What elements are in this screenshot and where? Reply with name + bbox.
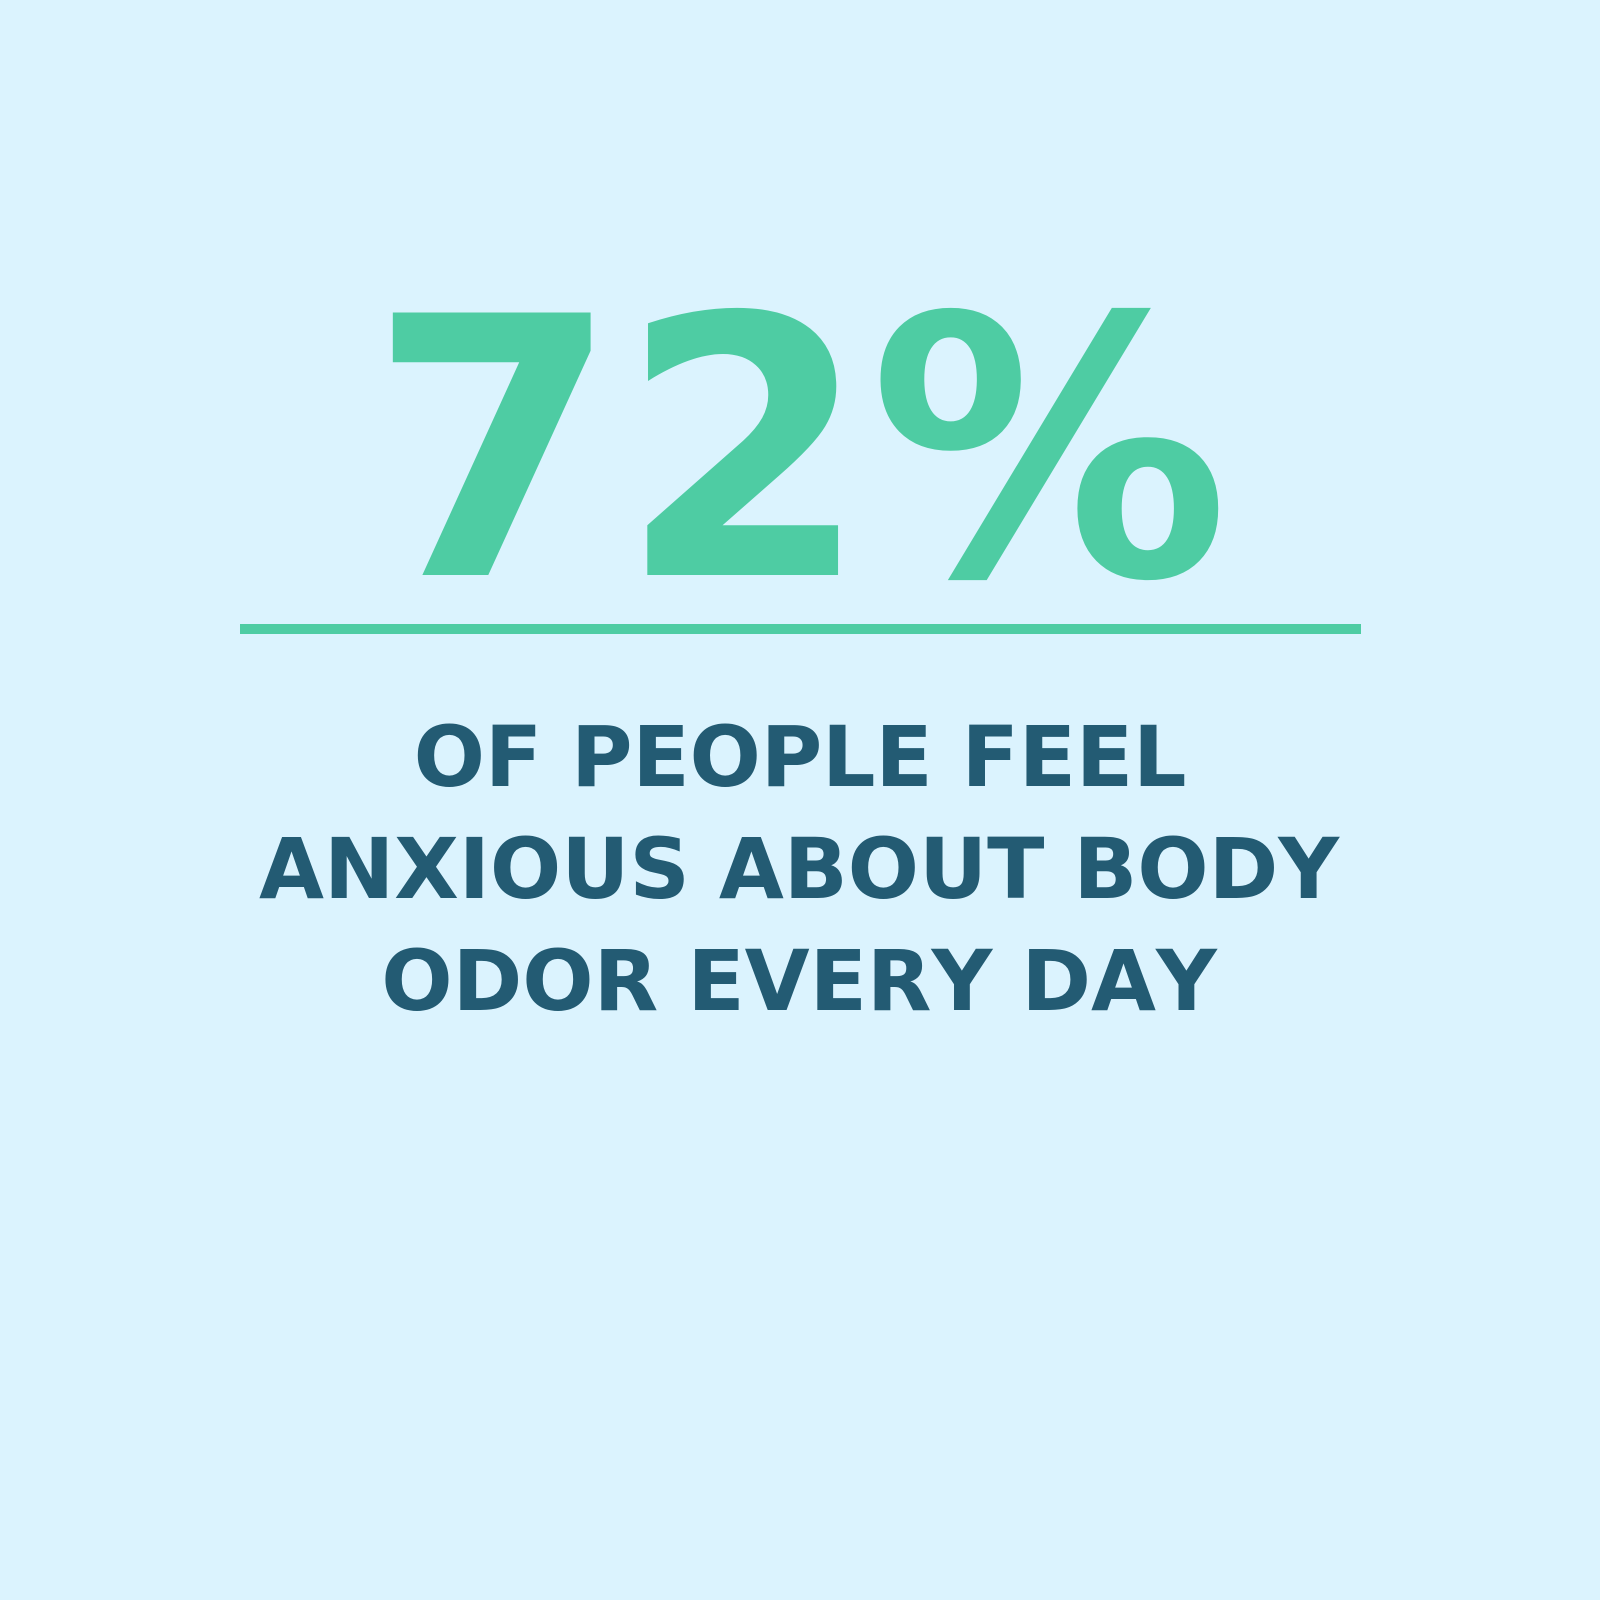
description text (259, 708, 1340, 1030)
description line 3: ODOR EVERY DAY (381, 932, 1217, 1030)
divider line (240, 624, 1361, 634)
description line 2: ANXIOUS ABOUT BODY (259, 820, 1339, 918)
description line 1: OF PEOPLE FEEL (414, 708, 1186, 806)
big statistic: 72%: 72% (369, 241, 1229, 660)
